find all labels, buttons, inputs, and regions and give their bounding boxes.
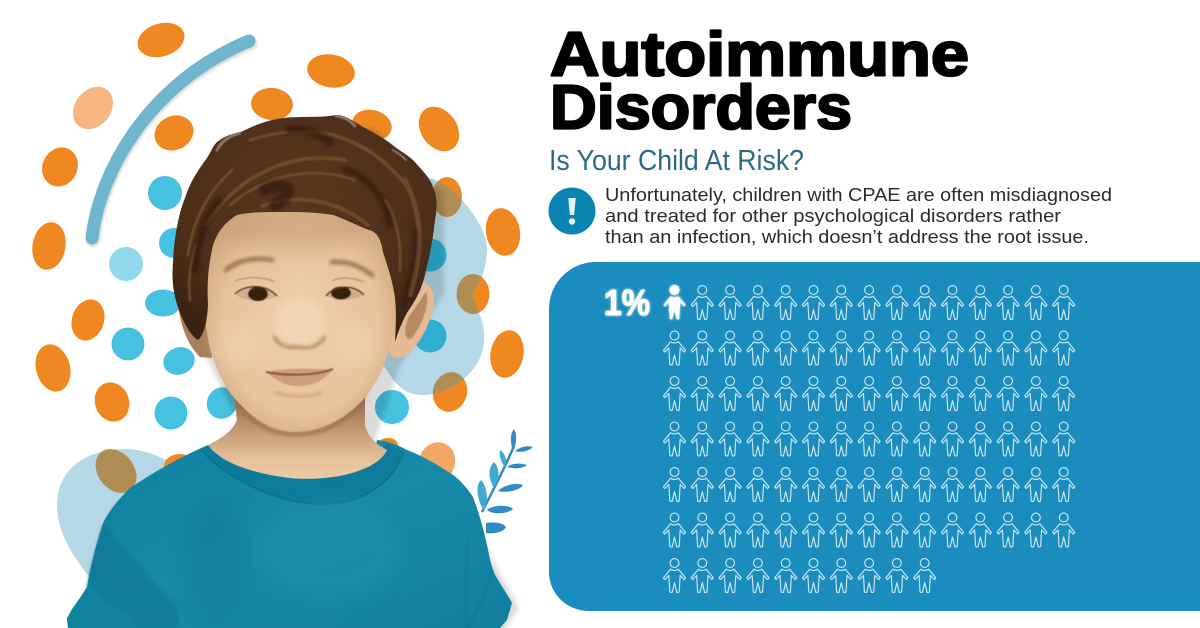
title: Disorders — [550, 74, 852, 142]
cyan dots — [112, 176, 409, 430]
nose — [274, 298, 325, 348]
mouth smile — [266, 369, 333, 396]
face — [205, 205, 397, 432]
title — [550, 20, 969, 142]
drop shadow — [72, 121, 519, 628]
t-shirt — [67, 440, 512, 628]
chin shadow — [222, 385, 370, 436]
light cyan dot — [109, 247, 143, 281]
leaf sprig — [477, 429, 533, 533]
body text: and treated for other psychological disorders rather — [605, 206, 1061, 226]
hair — [173, 115, 437, 342]
left ear area — [178, 300, 212, 358]
icon: alert — [548, 188, 596, 234]
orange dots — [29, 17, 527, 478]
child photo illustration — [67, 115, 519, 628]
body text: than an infection, which doesn’t address the root issue. — [605, 227, 1089, 247]
icon: highlighted child — [664, 285, 685, 319]
body text: Unfortunately, children with CPAE are often misdiagnosed — [605, 185, 1112, 205]
pale orange dots — [65, 79, 121, 137]
pale blue blob left — [57, 449, 190, 590]
arc stroke — [92, 41, 250, 240]
title: Autoimmune — [550, 20, 969, 90]
forehead shade — [215, 208, 375, 248]
overlaps inside right blob — [416, 181, 482, 394]
right ear — [388, 283, 434, 358]
background dots and blobs — [29, 17, 533, 590]
brown overlap left — [87, 441, 145, 501]
subtitle: Is Your Child At Risk? — [549, 145, 804, 177]
eyes — [235, 278, 364, 301]
body text — [605, 185, 1112, 247]
panel: statistics — [549, 262, 1200, 611]
one percent label: 1% — [604, 282, 650, 323]
neck — [208, 385, 387, 479]
eyebrows — [226, 259, 372, 275]
panel background — [549, 262, 1200, 611]
cheek glow — [218, 323, 377, 367]
pale blue blob right — [360, 178, 487, 395]
pictogram grid of children — [664, 286, 1075, 592]
